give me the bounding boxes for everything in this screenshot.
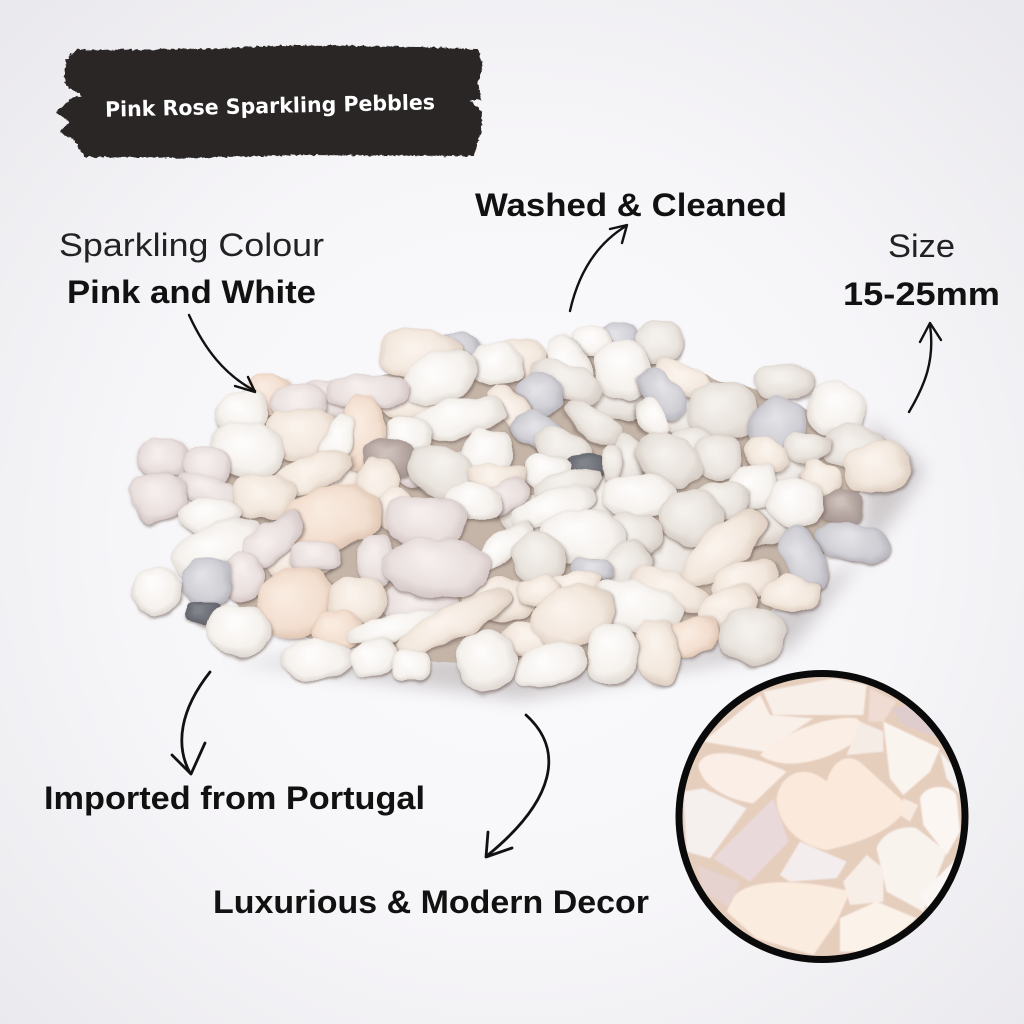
arrow: to luxurious label xyxy=(486,715,549,857)
arrow: to size label xyxy=(909,323,941,412)
close-up pebbles xyxy=(677,672,963,958)
label: size xyxy=(843,228,1000,312)
title text: Pink Rose Sparkling Pebbles xyxy=(105,90,435,122)
zoom-in circle xyxy=(677,672,965,960)
label: size: 15-25mm xyxy=(843,276,1000,312)
circle border xyxy=(679,674,965,960)
label: sparkling colour: Pink and White xyxy=(67,274,316,310)
label: imported: Imported from Portugal xyxy=(44,780,425,816)
title banner xyxy=(56,45,483,158)
pebble pile xyxy=(133,325,911,690)
label: sparkling colour: Sparkling Colour xyxy=(59,227,324,263)
pebble gaps xyxy=(200,350,870,670)
brush stroke xyxy=(56,45,483,158)
arrow: to imported label xyxy=(172,672,210,774)
arrow: to pebbles from colour label xyxy=(189,315,255,392)
label: luxurious: Luxurious & Modern Decor xyxy=(213,884,649,920)
label: size: Size xyxy=(888,228,955,264)
arrow: to washed label xyxy=(570,225,627,311)
label: sparkling colour xyxy=(59,227,324,310)
pile shadow xyxy=(230,420,925,700)
label: washed and cleaned: Washed & Cleaned xyxy=(475,187,787,223)
